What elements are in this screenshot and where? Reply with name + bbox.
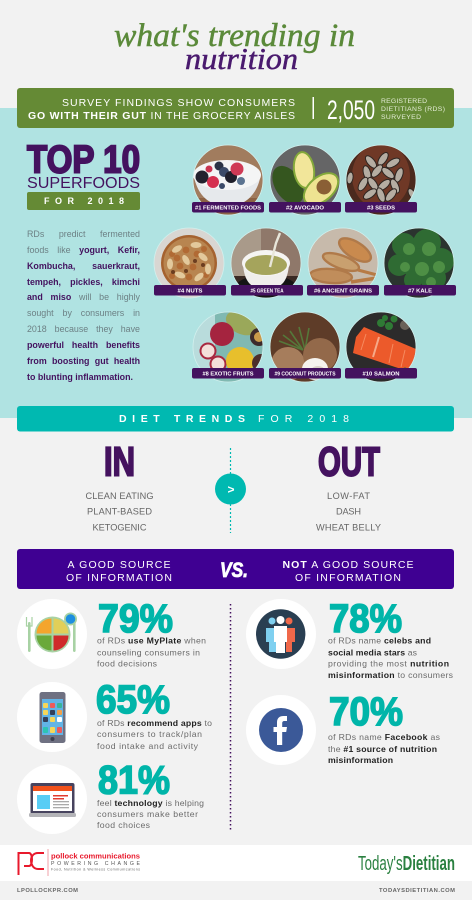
stat: 78 percent: of RDs name celebs and [328, 636, 431, 646]
icon: laptop [17, 764, 87, 834]
stat: 78 percent: social media stars as [328, 647, 418, 657]
stat: 78 percent [328, 597, 454, 680]
food labels: #5 GREEN TEA [250, 288, 284, 294]
footer urls [17, 888, 455, 894]
food: fermented foods [193, 145, 263, 218]
good vs not good banner: NOT A GOOD SOURCE [282, 559, 414, 571]
food labels: #6 ANCIENT GRAINS [314, 288, 372, 294]
stat: 79 percent: counseling consumers in [97, 647, 200, 657]
good vs not good banner: OF INFORMATION [66, 572, 172, 584]
icon: myplate [17, 599, 87, 669]
good vs not good banner: A GOOD SOURCE [68, 559, 170, 571]
food labels: #1 FERMENTED FOODS [195, 206, 261, 212]
superfoods paragraph: tempeh, pickles, kimchi [27, 277, 140, 287]
food labels: #8 EXOTIC FRUITS [202, 372, 254, 378]
stat: 65 percent: consumers to track/plan [97, 729, 202, 739]
food: salmon [346, 312, 416, 382]
food: exotic fruits [192, 312, 264, 382]
superfoods paragraph: sought by consumers in [27, 308, 140, 318]
survey banner [17, 88, 454, 128]
food: seeds [346, 143, 418, 215]
food: ancient grains [308, 228, 378, 298]
good vs not good banner [17, 549, 454, 589]
survey banner: SURVEYED [381, 114, 421, 121]
in column: KETOGENIC [92, 522, 147, 532]
stat: 79 percent: food decisions [97, 659, 158, 669]
survey banner: REGISTERED [381, 98, 427, 105]
survey banner: SURVEY FINDINGS SHOW CONSUMERS [62, 97, 295, 109]
superfoods paragraph: foods like yogurt, Kefir, [27, 245, 140, 255]
superfoods paragraph [27, 229, 140, 382]
food labels: #3 SEEDS [367, 206, 395, 212]
icon: people [246, 599, 316, 669]
stat: 65 percent: 65% [96, 678, 170, 722]
food: coconut products [270, 312, 340, 382]
footer band [0, 845, 472, 881]
in vs out divider with arrow [215, 448, 246, 533]
stat: 78 percent: misinformation to consumers [328, 670, 454, 680]
stat: 81 percent: 81% [98, 758, 170, 802]
stat: 65 percent: food intake and activity [97, 741, 199, 751]
stat: 70 percent [328, 690, 441, 765]
heading: top 10 superfoods: TOP 10 [27, 138, 140, 182]
stat: 81 percent: feel technology is helping [97, 798, 204, 808]
survey banner: DIETITIANS (RDS) [381, 106, 445, 113]
stat: 78 percent: providing the most nutrition [328, 659, 449, 669]
superfoods paragraph: Kombucha, sauerkraut, [27, 261, 140, 271]
stat: 79 percent [97, 597, 206, 669]
footer urls: LPOLLOCKPR.COM [17, 888, 78, 894]
pollock logo: Food, Nutrition & Wellness Communications [51, 868, 140, 872]
food labels: #4 NUTS [178, 288, 203, 294]
title: what's trending in [114, 18, 355, 54]
footer urls: TODAYSDIETITIAN.COM [379, 888, 455, 894]
out column: OUT [318, 438, 380, 484]
superfoods paragraph: and miso will be highly [27, 292, 140, 302]
heading: top 10 superfoods [27, 138, 140, 210]
food labels: #2 AVOCADO [286, 206, 324, 212]
out column: WHEAT BELLY [316, 522, 381, 532]
superfoods paragraph: from boosting gut health [27, 356, 140, 366]
in column [86, 438, 154, 532]
stat: 65 percent: of RDs recommend apps to [97, 718, 212, 728]
out column [316, 438, 381, 532]
stat: 65 percent [96, 678, 212, 751]
food: green tea [231, 228, 301, 299]
title: nutrition [185, 41, 298, 76]
superfoods paragraph: powerful health benefits [27, 340, 140, 350]
food: nuts [154, 228, 224, 298]
stat: 79 percent: 79% [98, 597, 173, 641]
heading: top 10 superfoods: SUPERFOODS [27, 175, 140, 192]
in column: PLANT-BASED [87, 506, 152, 516]
diet trends banner: DIET TRENDS [119, 413, 245, 425]
icon: facebook [246, 695, 316, 765]
in column: CLEAN EATING [86, 491, 154, 501]
stat: 70 percent: of RDs name Facebook as [328, 732, 441, 742]
out column: LOW-FAT [327, 491, 370, 501]
pollock logo: pollock communications [51, 852, 140, 860]
food: kale [384, 228, 454, 298]
stat: 79 percent: of RDs use MyPlate when [97, 636, 206, 646]
food labels: #7 KALE [408, 288, 432, 294]
superfoods paragraph: 2018 because they have [27, 324, 140, 334]
stat: 81 percent [97, 758, 204, 830]
pollock logo [18, 849, 141, 876]
stat: 70 percent: misinformation [328, 755, 393, 765]
heading: top 10 superfoods: FOR 2018 [44, 196, 124, 206]
food labels: #10 SALMON [362, 372, 400, 378]
in vs out divider with arrow: > [227, 482, 235, 496]
pollock logo: POWERING CHANGE [51, 861, 141, 867]
title [114, 18, 355, 76]
stat: 78 percent: 78% [329, 597, 402, 641]
survey banner: GO WITH THEIR GUT IN THE GROCERY AISLES [28, 110, 295, 122]
icon: smartphone apps [17, 682, 87, 752]
superfoods paragraph: to blunting inflammation. [27, 372, 133, 382]
good vs not good banner: VS. [220, 559, 248, 582]
out column: DASH [336, 506, 361, 516]
food labels [154, 202, 456, 378]
diet trends banner: FOR 2018 [258, 413, 349, 425]
good vs not good banner: OF INFORMATION [295, 572, 401, 584]
in column: IN [104, 438, 135, 484]
survey banner: 2,050 [327, 95, 375, 125]
stat: 81 percent: food choices [97, 820, 151, 830]
stat: 81 percent: consumers make better [97, 809, 198, 819]
food: avocado [266, 145, 345, 215]
food labels: #9 COCONUT PRODUCTS [274, 372, 336, 378]
superfoods paragraph: RDs predict fermented [27, 229, 140, 239]
stat: 70 percent: the #1 source of nutrition [328, 744, 437, 754]
stat: 70 percent: 70% [329, 690, 403, 734]
diet trends banner [17, 406, 454, 432]
